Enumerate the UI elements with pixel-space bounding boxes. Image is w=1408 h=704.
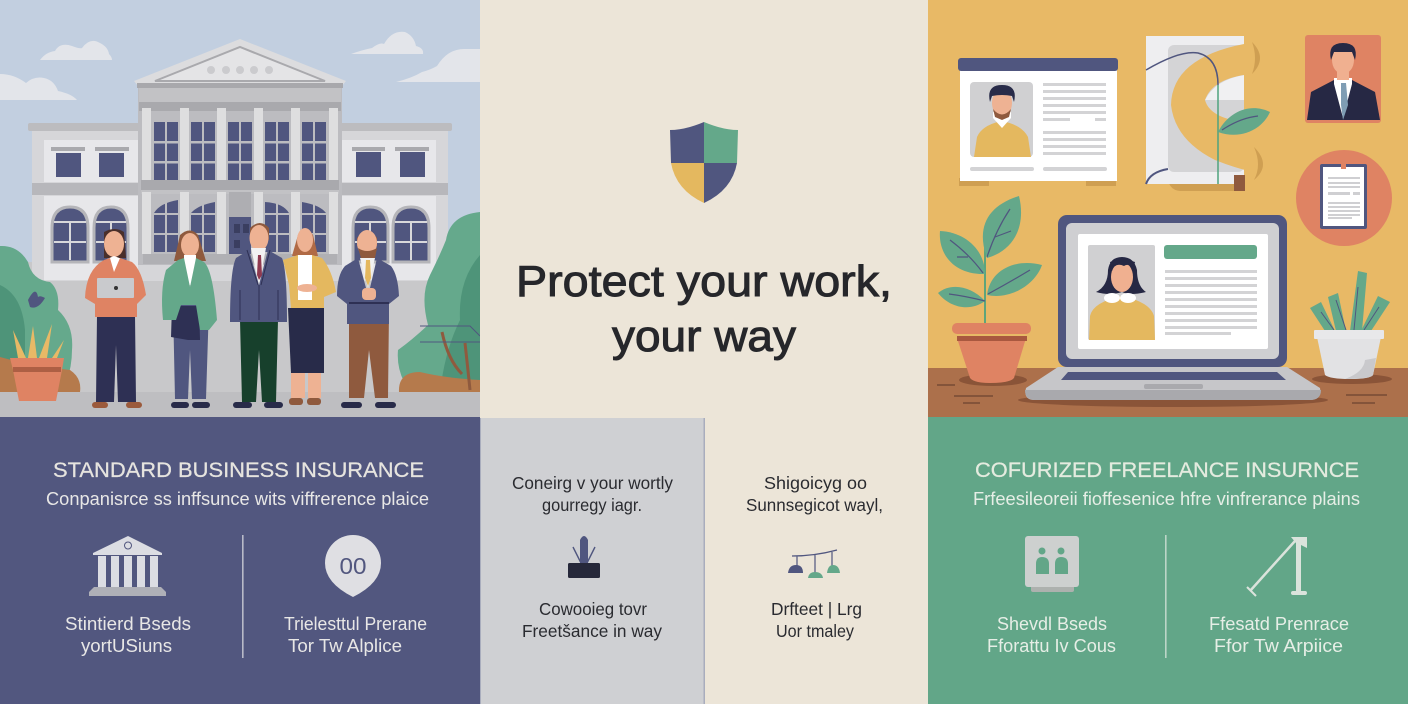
bottom text bbox=[522, 599, 662, 641]
icon: hanging scale bbox=[788, 550, 840, 578]
icon: shield bbox=[670, 122, 738, 203]
lower central windows bbox=[154, 200, 326, 252]
icon: two people tile bbox=[1025, 536, 1079, 592]
icon: bank bbox=[89, 536, 166, 596]
right caption: Ffesatd Prenrace bbox=[1209, 614, 1349, 634]
top text bbox=[512, 473, 673, 515]
bottom text: Uor tmaley bbox=[776, 621, 854, 641]
upper central windows bbox=[154, 122, 326, 181]
bottom text: Drfteet | Lrg bbox=[771, 599, 862, 619]
left caption bbox=[65, 614, 191, 656]
bottom text: Freetšance in way bbox=[522, 621, 662, 641]
plant pot left bbox=[10, 324, 64, 401]
icon: pin with 00 bbox=[325, 535, 381, 597]
subheading: Frfeesileoreii fioffesenice hfre vinfrerance plains bbox=[973, 489, 1360, 509]
panel: standard business insurance bbox=[0, 417, 480, 704]
person 3 bbox=[230, 223, 287, 408]
left caption bbox=[987, 614, 1116, 656]
bushes bbox=[0, 212, 480, 392]
right caption: Ffor Tw Arpiice bbox=[1214, 636, 1343, 656]
panel: standard business illustration bbox=[0, 0, 480, 418]
right caption: Trielesttul Prerane bbox=[284, 614, 427, 634]
top text: gourregy iagr. bbox=[542, 495, 642, 515]
people bbox=[85, 223, 399, 408]
laptop bbox=[1018, 215, 1328, 407]
top text: Shigoicyg oo bbox=[764, 473, 867, 493]
panel: freelance insurance bbox=[928, 417, 1408, 704]
clipboard badge bbox=[1296, 150, 1392, 246]
panel: grey middle column bbox=[480, 418, 704, 704]
right caption: Tor Tw Alplice bbox=[288, 636, 402, 656]
top text bbox=[746, 473, 883, 515]
heading: STANDARD BUSINESS INSURANCE bbox=[53, 459, 424, 482]
title: your way bbox=[612, 312, 796, 361]
panel: beige middle column bbox=[704, 418, 928, 704]
left caption: Shevdl Bseds bbox=[997, 614, 1107, 634]
left caption: Fforattu Iv Cous bbox=[987, 636, 1116, 656]
divider bbox=[242, 535, 244, 658]
panel: freelance illustration bbox=[928, 0, 1408, 418]
building bbox=[28, 39, 452, 281]
title bbox=[516, 257, 892, 361]
document and leaf bbox=[1146, 36, 1270, 191]
wing windows bbox=[51, 147, 429, 151]
plant right bbox=[1310, 271, 1392, 403]
columns bbox=[142, 108, 338, 254]
divider bbox=[1165, 535, 1167, 658]
right caption bbox=[284, 614, 427, 656]
icon: stamp bbox=[568, 536, 600, 578]
panel: center headline bbox=[480, 0, 928, 418]
left caption: yortUSiuns bbox=[81, 636, 172, 656]
top text: Coneirg v your wortly bbox=[512, 473, 673, 493]
person 4 bbox=[283, 228, 336, 405]
subheading: Conpanisrce ss inffsunce wits viffrerence plaice bbox=[46, 489, 429, 509]
person 1 bbox=[85, 229, 146, 408]
person 2 bbox=[162, 230, 217, 408]
right caption bbox=[1209, 614, 1349, 656]
title: Protect your work, bbox=[516, 257, 892, 306]
icon: pin with 00: 00 bbox=[340, 553, 366, 579]
heading: COFURIZED FREELANCE INSURNCE bbox=[975, 459, 1359, 482]
person 5 bbox=[337, 230, 399, 408]
top text: Sunnsegicot wayl, bbox=[746, 495, 883, 515]
bottom text bbox=[771, 599, 862, 641]
plant left bbox=[937, 196, 1042, 403]
left caption: Stintierd Bseds bbox=[65, 614, 191, 634]
bottom text: Cowooieg tovr bbox=[539, 599, 647, 619]
clouds bbox=[0, 32, 480, 100]
profile card bbox=[958, 58, 1118, 186]
portrait bbox=[1305, 35, 1381, 123]
icon: arrow bbox=[1247, 537, 1307, 596]
